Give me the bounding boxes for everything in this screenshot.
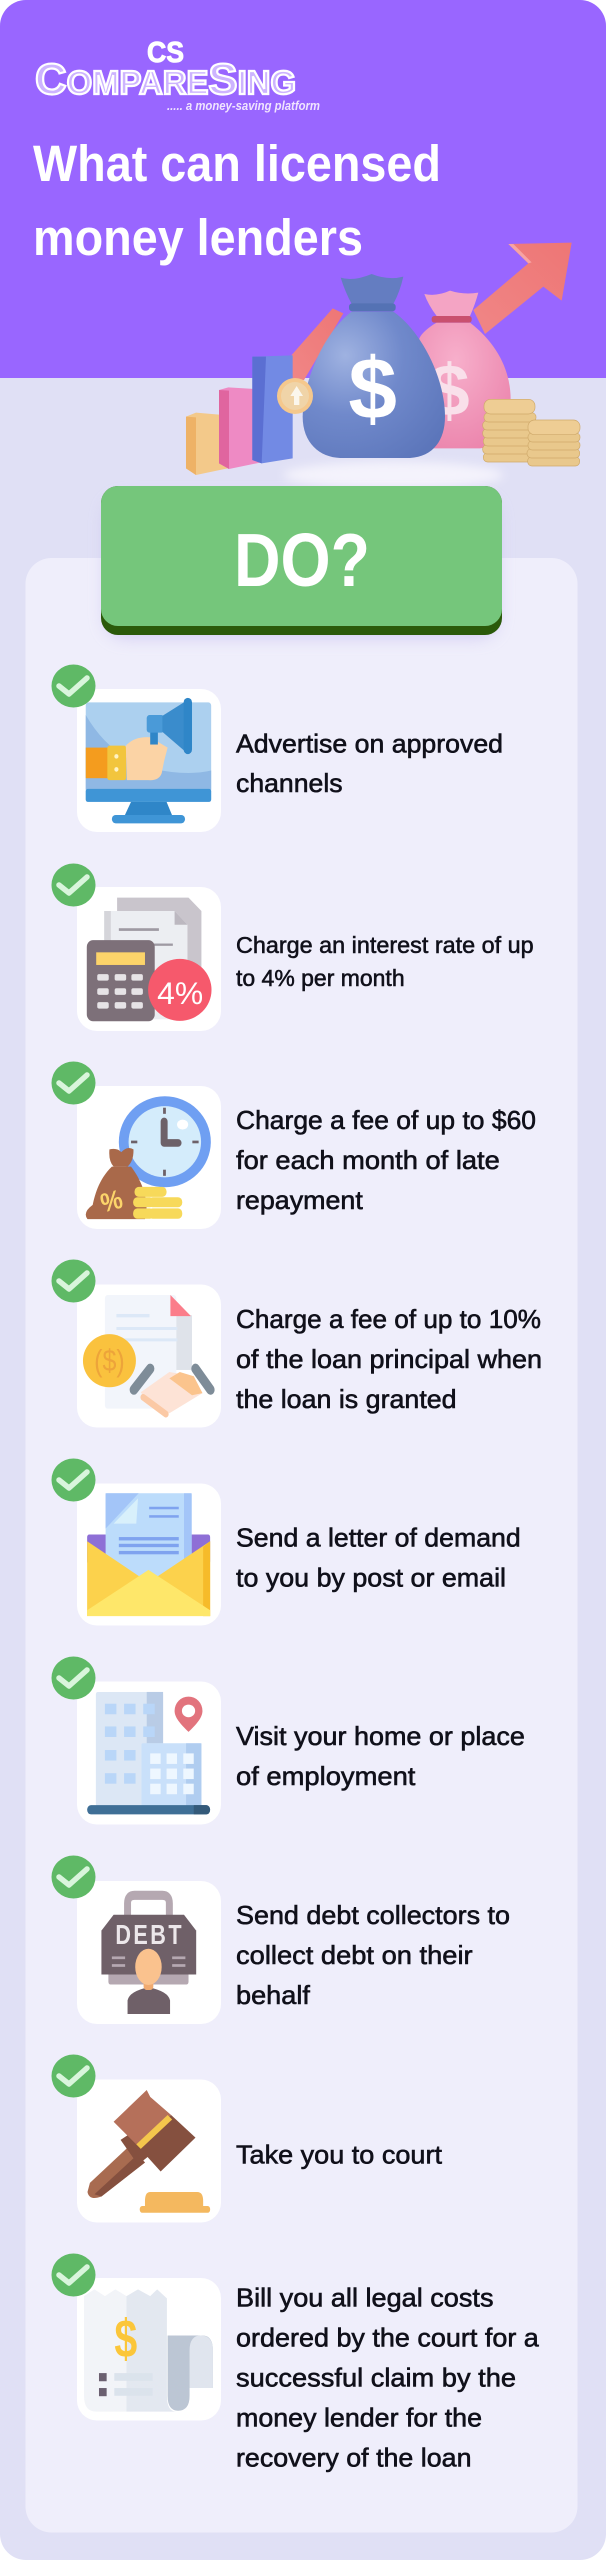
text: Charge an interest rate of up: [236, 932, 534, 958]
check mark: [52, 1458, 96, 1502]
rising arrow: [292, 243, 572, 380]
item 8: court: [52, 2054, 443, 2222]
card: [77, 1086, 221, 1229]
card: [77, 2278, 221, 2420]
bar chart blocks: [186, 355, 293, 475]
item 6: home visit: [52, 1656, 525, 1824]
check mark: [52, 2254, 96, 2296]
icon: contract, coin and handshake: [83, 1295, 210, 1414]
text: Charge a fee of up to 10%: [236, 1304, 541, 1334]
text: for each month of late: [236, 1145, 500, 1175]
text: Bill you all legal costs: [236, 2282, 494, 2312]
icon: office building with location pin: [87, 1692, 210, 1814]
logo: CompareSing: CS: [147, 37, 184, 69]
check mark: [52, 1260, 96, 1302]
check mark: [52, 1856, 96, 1898]
icon: contract, coin and handshake: ($): [94, 1344, 125, 1378]
check mark: [52, 2054, 96, 2098]
button: DO?: [101, 486, 502, 635]
icon: envelope with letter: [87, 1493, 210, 1616]
card: [77, 887, 221, 1031]
blue money bag: [303, 274, 445, 458]
card: [77, 689, 221, 832]
icon: monitor with megaphone: [86, 698, 211, 823]
text: behalf: [236, 1980, 311, 2010]
item 1: advertise: [52, 664, 503, 832]
card: [77, 1881, 221, 2024]
button: DO?: DO?: [234, 518, 370, 602]
card: [77, 2080, 221, 2222]
text: [236, 1900, 510, 2010]
text: money lender for the: [236, 2402, 482, 2432]
icon: calculator with 4 percent: 4%: [157, 977, 203, 1011]
check mark: [52, 864, 96, 906]
text: [236, 1304, 542, 1414]
item 7: debt collectors: [52, 1856, 510, 2024]
logo: CompareSing: ..... a money-saving platform: [167, 98, 320, 113]
button shadow: [105, 498, 498, 638]
content panel: [26, 558, 578, 2532]
pink money bag: $: [429, 349, 470, 431]
text: ordered by the court for a: [236, 2323, 539, 2353]
title: What can licensed: [33, 135, 441, 192]
text: Charge a fee of up to $60: [236, 1105, 536, 1135]
text: Send a letter of demand: [236, 1523, 521, 1553]
item 5: letter of demand: [52, 1458, 521, 1626]
icon: calculator with 4 percent: [87, 898, 212, 1021]
icon: legal bill receipt: $: [114, 2310, 137, 2370]
item 3: late fee: [52, 1062, 536, 1229]
text: Take you to court: [236, 2139, 443, 2169]
icon: legal bill receipt: [84, 2289, 213, 2412]
text: repayment: [236, 1185, 364, 1215]
text: Advertise on approved: [236, 728, 503, 758]
card: [77, 1682, 221, 1824]
text: to you by post or email: [236, 1563, 506, 1593]
text: of the loan principal when: [236, 1344, 542, 1374]
card: [77, 1484, 221, 1626]
text: to 4% per month: [236, 965, 405, 991]
pink money bag: [419, 291, 511, 448]
text: of employment: [236, 1761, 416, 1791]
text: Send debt collectors to: [236, 1900, 510, 1930]
text: [236, 1523, 521, 1593]
coin stacks: [483, 399, 580, 466]
text: recovery of the loan: [236, 2442, 472, 2472]
up arrow badge: [277, 378, 313, 414]
item 4: principal fee: [52, 1260, 542, 1428]
title: [33, 135, 441, 266]
icon: debt collector with sign: [101, 1895, 196, 2014]
icon: clock and money bag: %: [98, 1185, 126, 1219]
text: Visit your home or place: [236, 1721, 525, 1751]
header band: [0, 0, 606, 378]
ground glow: [283, 462, 503, 488]
logo: CompareSing: COMPARESING: [35, 55, 296, 104]
check mark: [52, 664, 96, 708]
icon: clock and money bag: [86, 1096, 211, 1219]
icon: debt collector with sign: DEBT: [115, 1920, 182, 1951]
text: [236, 1721, 525, 1791]
item 2: interest rate: [52, 864, 534, 1031]
text: [236, 728, 503, 798]
text: collect debt on their: [236, 1940, 473, 1970]
text: successful claim by the: [236, 2363, 516, 2393]
item 9: legal costs: [52, 2254, 539, 2472]
logo: CompareSing: [35, 37, 320, 113]
text: [236, 932, 534, 991]
check mark: [52, 1062, 96, 1104]
text: channels: [236, 768, 343, 798]
icon: gavel: [87, 2090, 210, 2213]
check mark: [52, 1656, 96, 1700]
blue money bag: $: [348, 339, 397, 437]
title: money lenders: [33, 209, 363, 266]
card: [77, 1284, 221, 1428]
text: the loan is granted: [236, 1384, 457, 1414]
text: [236, 1105, 536, 1215]
hero illustration: money bags, bars, arrow and coins: [186, 243, 580, 488]
text: [236, 2282, 539, 2472]
